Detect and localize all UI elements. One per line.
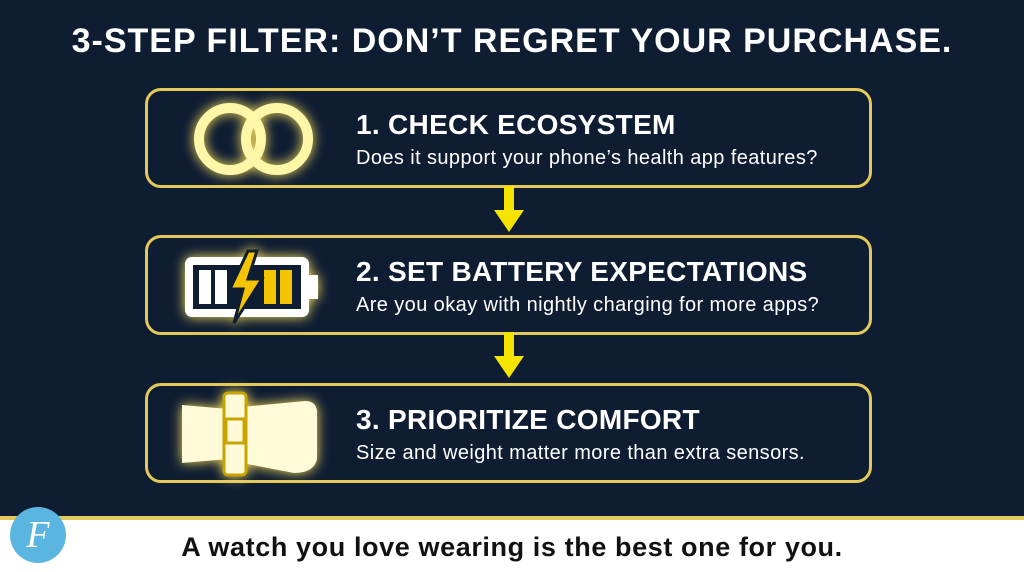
logo: F — [26, 514, 50, 556]
arrow 1 — [494, 186, 524, 232]
panel: step 3 — [145, 383, 872, 483]
heading 2: 2. SET BATTERY EXPECTATIONS — [356, 256, 808, 287]
panel: step 2 — [145, 235, 872, 335]
arrow 2 — [494, 332, 524, 378]
footer banner — [0, 516, 1024, 572]
panel: step 1 — [145, 88, 872, 188]
icon: rings — [184, 93, 323, 185]
logo — [10, 507, 66, 563]
title: 3-STEP FILTER: DON’T REGRET YOUR PURCHASE. — [72, 22, 952, 60]
heading 3: 3. PRIORITIZE COMFORT — [356, 404, 700, 435]
icon: battery — [174, 240, 328, 330]
icon: wrist watch — [172, 382, 328, 486]
text 3: Size and weight matter more than extra sensors. — [356, 442, 805, 464]
footer text: A watch you love wearing is the best one for you. — [181, 532, 843, 562]
text 2: Are you okay with nightly charging for more apps? — [356, 294, 819, 316]
heading 1: 1. CHECK ECOSYSTEM — [356, 109, 676, 140]
text 1: Does it support your phone’s health app features? — [356, 147, 818, 169]
